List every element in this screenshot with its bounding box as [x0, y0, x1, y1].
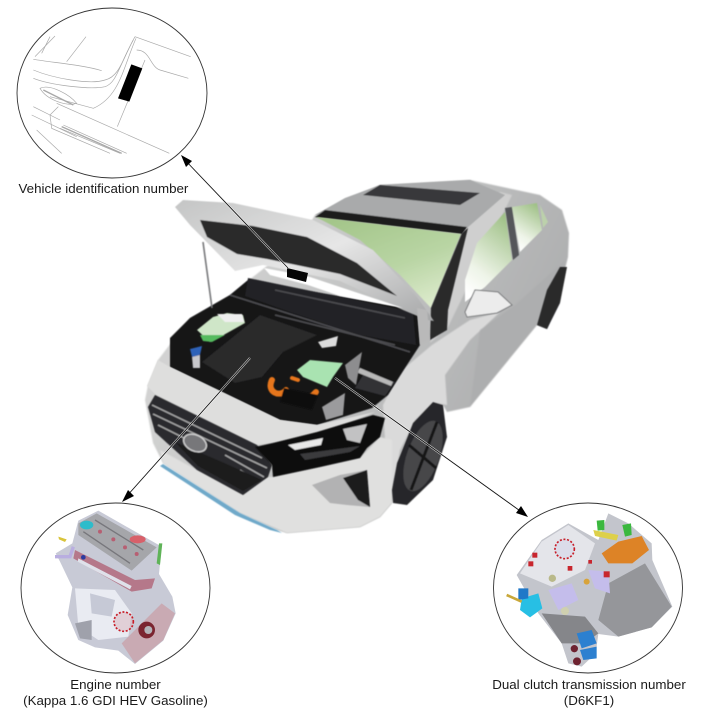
blue sensor [81, 555, 86, 560]
cowl and engine bay [170, 278, 420, 425]
orange cables [271, 378, 316, 396]
car body [145, 180, 569, 533]
dark red plugs [571, 645, 581, 665]
cylinder head [78, 513, 157, 571]
car with open hood [145, 180, 569, 533]
manifold [73, 550, 155, 592]
hood panel [175, 200, 434, 345]
arrow: to transmission circle [335, 378, 528, 517]
reservoir white top [217, 314, 244, 322]
cam cover bolts [98, 530, 139, 556]
hinge [417, 308, 430, 345]
washer neck [192, 355, 200, 368]
green dipstick [157, 543, 162, 565]
crankcase detail [75, 588, 132, 640]
front hood nose [147, 360, 375, 445]
blue fitting [518, 588, 528, 600]
side mirror [465, 290, 512, 317]
red cover [130, 535, 146, 543]
orange actuator [602, 536, 649, 563]
lower blue actuator [580, 647, 597, 660]
gold lever [507, 595, 522, 602]
crank pulley [138, 622, 155, 638]
label: transmission number: Dual clutch transmission number [492, 677, 686, 692]
red markers [528, 553, 610, 577]
transmission number marker [555, 539, 574, 559]
engine number marker [114, 612, 133, 631]
headlight [255, 415, 385, 477]
reservoir green band [200, 335, 225, 342]
circle: dual clutch transmission number [494, 503, 682, 673]
arrow: to engine circle [122, 358, 250, 502]
side windows [430, 203, 548, 340]
cyan motor [520, 593, 542, 617]
front bumper [160, 437, 392, 533]
circle: engine number [21, 503, 210, 673]
rear wheel [537, 267, 567, 329]
front fog lamp [312, 470, 370, 507]
junction box [280, 388, 318, 410]
transmission housing [517, 513, 672, 667]
grille [148, 395, 272, 495]
roof and sunroof [315, 180, 505, 234]
engine bay components [190, 313, 362, 420]
knobs [549, 575, 590, 615]
lavender hose [55, 547, 73, 557]
upper light housing [520, 525, 595, 587]
oil cap [80, 521, 93, 529]
aluminum parts [322, 393, 345, 420]
engine illustration [55, 511, 176, 664]
flange [122, 603, 175, 663]
yellow fitting [58, 537, 67, 542]
hood strut [203, 242, 212, 308]
inverter cover [297, 360, 343, 387]
arrow: to VIN circle [181, 155, 288, 268]
lavender valve body [548, 570, 610, 610]
label: engine number: (Kappa 1.6 GDI HEV Gasoline) [23, 693, 208, 708]
black VIN plate [118, 64, 142, 102]
logo [181, 431, 209, 455]
washer cap [190, 346, 202, 357]
yellow bracket [593, 530, 618, 541]
label: vehicle identification number: Vehicle identification number [18, 181, 189, 196]
label: transmission number: (D6KF1) [564, 693, 614, 708]
engine cover [202, 315, 317, 383]
green solenoid [597, 520, 604, 531]
left coolant reservoir [197, 313, 245, 342]
VIN location line drawing [32, 36, 191, 153]
front bumper lip [160, 464, 282, 533]
front wheel [392, 402, 451, 505]
blue gear actuator [577, 630, 597, 648]
dark housing shade [542, 563, 672, 643]
windshield [316, 217, 461, 308]
transmission illustration [507, 513, 672, 667]
green connector [622, 523, 632, 537]
engine block [56, 511, 176, 664]
label: engine number: Engine number [70, 677, 161, 692]
VIN location label [287, 268, 308, 282]
circle: vehicle identification number [17, 8, 207, 178]
